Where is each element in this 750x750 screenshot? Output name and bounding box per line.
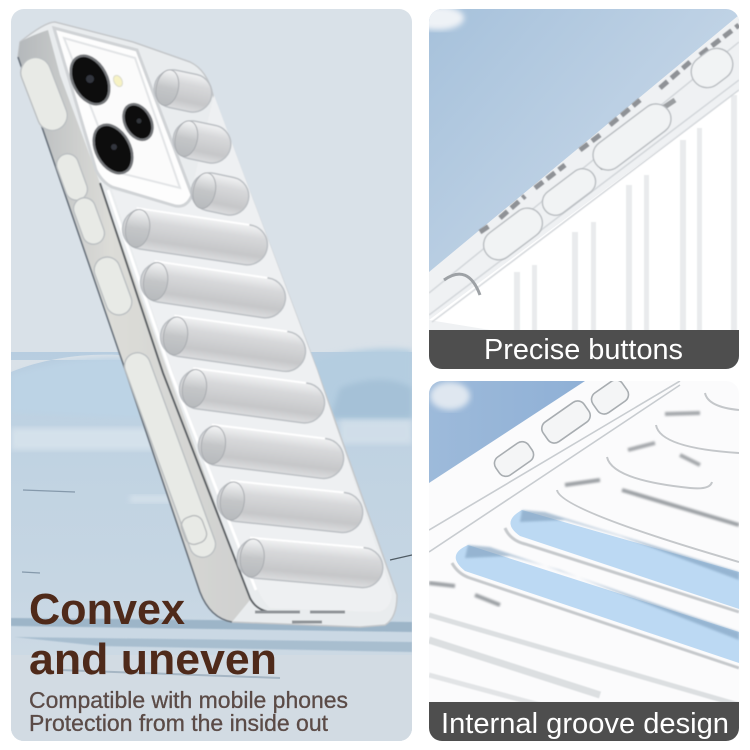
side buttons bbox=[478, 42, 739, 266]
camera island bbox=[54, 28, 192, 206]
blue groove 1 bbox=[510, 510, 739, 609]
side strip bbox=[18, 30, 250, 622]
phone case bbox=[16, 22, 397, 627]
lenses bbox=[68, 54, 154, 176]
bottom ports bbox=[255, 612, 345, 622]
title: Convex bbox=[29, 585, 186, 634]
lines bbox=[429, 528, 739, 705]
label: Precise buttons bbox=[484, 334, 683, 366]
rails bbox=[429, 381, 680, 552]
title line 2: and uneven bbox=[29, 635, 277, 684]
panel: main product photo bbox=[11, 9, 412, 741]
back panel bbox=[213, 96, 326, 399]
outline grooves bbox=[557, 393, 739, 562]
label bar bbox=[429, 330, 739, 369]
panel: internal groove bbox=[429, 377, 739, 741]
small grooves bbox=[151, 66, 252, 219]
grooves stripes bbox=[514, 95, 737, 332]
label: Internal groove design bbox=[441, 708, 729, 740]
side buttons bbox=[16, 53, 219, 561]
sky bbox=[429, 381, 585, 483]
case bbox=[429, 381, 739, 741]
label bar bbox=[429, 702, 739, 741]
blue groove 2 bbox=[456, 545, 739, 663]
rails bbox=[429, 25, 739, 322]
case edge bbox=[429, 16, 739, 330]
side buttons bbox=[491, 377, 632, 479]
subtitle: Compatible with mobile phones bbox=[29, 687, 348, 713]
background sky and sea bbox=[11, 9, 412, 741]
long grooves bbox=[120, 206, 384, 589]
sky bbox=[429, 9, 739, 369]
panel: precise buttons bbox=[412, 6, 739, 369]
subtitle line 2: Protection from the inside out bbox=[29, 710, 329, 736]
